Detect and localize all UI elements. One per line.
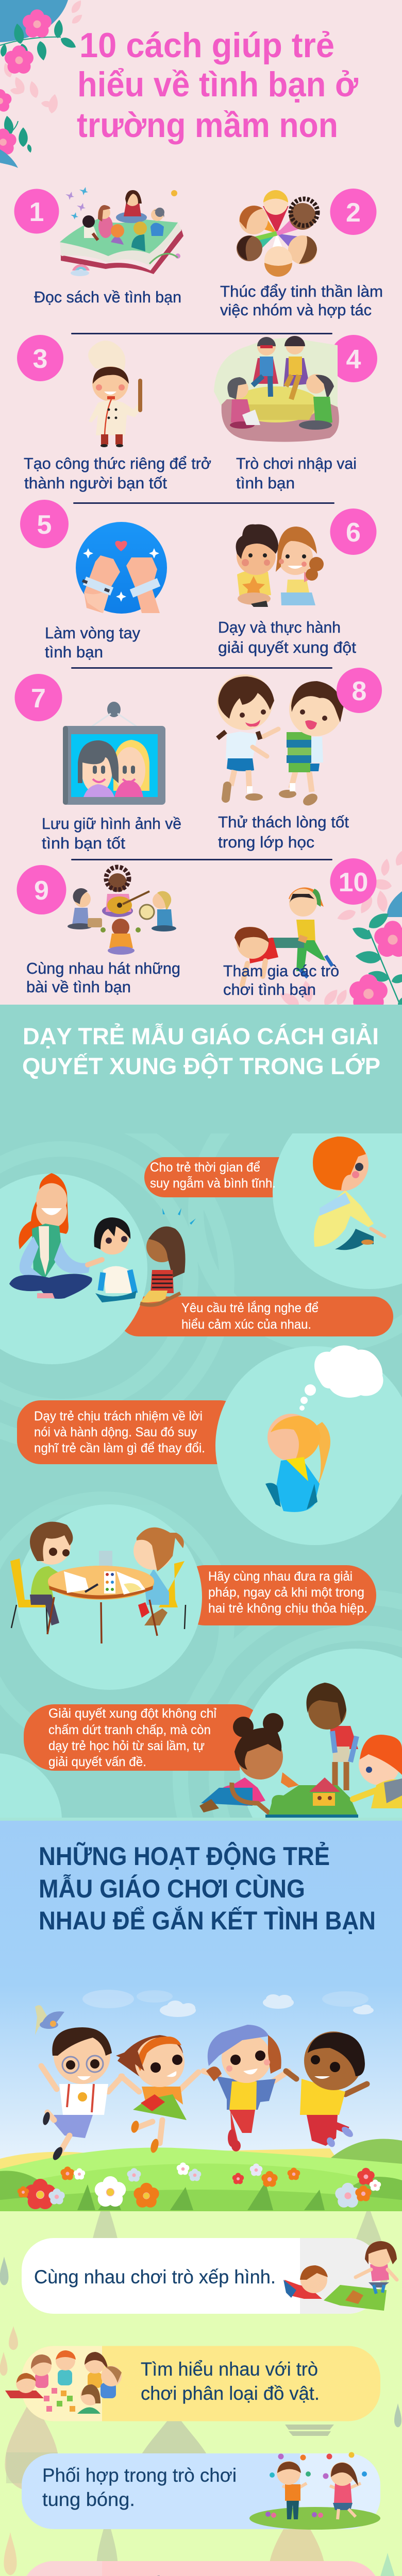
title: hiểu về tình bạn ở bbox=[77, 65, 359, 104]
text: find solutions bbox=[208, 1569, 367, 1616]
section heading: DẠY TRẺ MẪU GIÁO CÁCH GIẢI bbox=[23, 1023, 379, 1049]
item 6: teach conflict resolution: 6 bbox=[346, 518, 361, 548]
item 3: friendship recipe: 3 bbox=[33, 344, 47, 374]
item 3: friendship recipe bbox=[17, 335, 211, 492]
flowers in grass bbox=[18, 2162, 381, 2209]
item 2: team spirit bbox=[220, 189, 383, 319]
activity 1: puzzle: Cùng nhau chơi trò xếp hình. bbox=[34, 2266, 276, 2287]
item 9: sing friendship songs: Cùng nhau hát những bbox=[26, 959, 180, 977]
text: learn from mistakes: giải quyết vấn đề. bbox=[48, 1755, 146, 1769]
illustration: thinking girl with cloud bbox=[265, 1345, 383, 1512]
item 10: friendship games: chơi tình bạn bbox=[223, 980, 316, 998]
activity 4: listening bbox=[5, 2561, 380, 2576]
text: listen bbox=[181, 1300, 319, 1332]
item 4: friendship role play: tình bạn bbox=[236, 474, 295, 492]
icon: kids role-playing as superheroes bbox=[214, 336, 339, 442]
illustration: kids playing on pop-up book bbox=[199, 1683, 402, 1819]
text: learn from mistakes: chấm dứt tranh chấp, mà còn bbox=[48, 1723, 211, 1737]
activity 3: ball toss: Phối hợp trong trò chơi bbox=[42, 2465, 237, 2486]
panel: 10 ways section bbox=[0, 0, 402, 1005]
text: responsibility: Dạy trẻ chịu trách nhiệm về lời bbox=[34, 1409, 203, 1423]
activity 2: sorting game: Tìm hiểu nhau với trò bbox=[141, 2359, 318, 2380]
item 9: sing friendship songs bbox=[16, 865, 180, 996]
speech bubbles bbox=[17, 1157, 393, 1771]
thought bubble bbox=[299, 1345, 383, 1411]
item 7: keep friendship pictures: tình bạn tốt bbox=[42, 834, 125, 852]
title bbox=[77, 26, 359, 145]
item 6: teach conflict resolution: giải quyết xung đột bbox=[218, 638, 356, 656]
item 5: friendship bracelets bbox=[20, 500, 167, 661]
text: listen: Yêu cầu trẻ lắng nghe để bbox=[181, 1300, 319, 1315]
section header band bbox=[0, 1005, 402, 1133]
item 2: team spirit: 2 bbox=[346, 198, 361, 228]
icon: kids tossing balls bbox=[249, 2452, 380, 2530]
item 1: read books about friendship: Đọc sách về tình bạn bbox=[34, 288, 181, 306]
panel: activities list bbox=[0, 2211, 401, 2576]
text: listen: hiểu cảm xúc của nhau. bbox=[181, 1317, 311, 1332]
icon: kids playing music bbox=[68, 867, 176, 955]
item 5: friendship bracelets: 5 bbox=[37, 510, 52, 540]
item 2: team spirit: Thúc đẩy tinh thần làm bbox=[220, 282, 383, 300]
text: responsibility bbox=[34, 1409, 205, 1455]
text: give time bbox=[150, 1160, 276, 1191]
text: give time: suy ngẫm và bình tĩnh. bbox=[150, 1176, 276, 1191]
icon: boy and girl whispering bbox=[236, 524, 324, 607]
girl with headband bbox=[116, 2035, 198, 2154]
text: give time: Cho trẻ thời gian để bbox=[150, 1160, 260, 1175]
text: learn from mistakes: dạy trẻ học hỏi từ sai lầm, tự bbox=[48, 1739, 205, 1753]
kid with blue cap bbox=[204, 2025, 289, 2151]
item 7: keep friendship pictures: Lưu giữ hình ảnh về bbox=[42, 815, 181, 833]
item 3: friendship recipe: thành người bạn tốt bbox=[24, 474, 167, 492]
kid with glasses bbox=[41, 2027, 122, 2162]
item 7: keep friendship pictures: 7 bbox=[31, 684, 46, 714]
panel: conflict resolution section bbox=[0, 1005, 402, 1821]
section heading: QUYẾT XUNG ĐỘT TRONG LỚP bbox=[22, 1053, 380, 1079]
item 10: friendship games bbox=[223, 858, 376, 998]
item 8: kindness challenge: 8 bbox=[352, 676, 366, 706]
icon: kids on open book bbox=[60, 187, 183, 276]
decoration: bottom-right flowers bbox=[278, 846, 402, 1011]
text: responsibility: nói và hành dộng. Sau đó suy bbox=[34, 1425, 197, 1439]
illustration: four kids jumping hand in hand bbox=[41, 2025, 367, 2162]
text: learn from mistakes: Giải quyết xung đột không chỉ bbox=[48, 1706, 216, 1721]
section heading: MẪU GIÁO CHƠI CÙNG bbox=[39, 1874, 305, 1903]
icon: wrists with friendship bracelets bbox=[76, 522, 167, 614]
item 6: teach conflict resolution: Dạy và thực hành bbox=[218, 618, 341, 636]
illustration: teacher with two kids bbox=[9, 1173, 196, 1305]
illustration: kids drawing at table bbox=[10, 1522, 186, 1643]
icon: framed photo of two friends bbox=[63, 702, 165, 805]
item 3: friendship recipe: Tạo công thức riêng để trở bbox=[24, 454, 211, 472]
decoration: top-left flowers bbox=[0, 0, 84, 168]
item 6: teach conflict resolution bbox=[218, 509, 376, 656]
item 4: friendship role play bbox=[214, 335, 377, 492]
item 5: friendship bracelets: tình bạn bbox=[45, 643, 103, 661]
section heading: NHAU ĐỂ GẮN KẾT TÌNH BẠN bbox=[39, 1906, 376, 1935]
item 4: friendship role play: 4 bbox=[346, 345, 361, 375]
item 1: read books about friendship bbox=[14, 187, 183, 306]
text: find solutions: Hãy cùng nhau đưa ra giải bbox=[208, 1569, 353, 1584]
item 8: kindness challenge: Thử thách lòng tốt bbox=[218, 813, 349, 831]
item 8: kindness challenge bbox=[217, 668, 382, 851]
item 2: team spirit: việc nhóm và hợp tác bbox=[220, 301, 372, 319]
icon: kids sorting blocks bbox=[5, 2350, 122, 2414]
item 9: sing friendship songs: bài về tình bạn bbox=[26, 978, 131, 996]
section heading bbox=[39, 1841, 376, 1935]
boy with curly hair bbox=[286, 2031, 367, 2148]
icon: wheelbarrow race bbox=[234, 888, 332, 985]
text: find solutions: hai trẻ không chịu thỏa hiệp. bbox=[208, 1601, 367, 1616]
icon: chef boy bbox=[88, 341, 142, 447]
item 8: kindness challenge: trong lớp học bbox=[218, 833, 314, 851]
grass and hills bbox=[0, 2139, 402, 2211]
section heading bbox=[22, 1023, 380, 1079]
activity 2: sorting game: chơi phân loại đồ vật. bbox=[141, 2383, 320, 2404]
icon: kids with puzzle bbox=[283, 2241, 397, 2311]
panel: friendship activities hero bbox=[0, 1821, 402, 2211]
item 10: friendship games: 10 bbox=[339, 868, 368, 897]
illustration: boy sitting alone bbox=[313, 1137, 384, 1250]
text: learn from mistakes bbox=[48, 1706, 216, 1769]
text: responsibility: nghĩ trẻ cần làm gì để thay đổi. bbox=[34, 1441, 205, 1455]
text: find solutions: pháp, ngay cả khi một trong bbox=[208, 1585, 364, 1600]
title: trường mầm non bbox=[77, 106, 338, 145]
icon: bluebird bbox=[35, 2005, 64, 2035]
item 10: friendship games: Tham gia các trò bbox=[223, 962, 339, 980]
item 4: friendship role play: Trò chơi nhập vai bbox=[236, 454, 357, 472]
activity 1: puzzle bbox=[22, 2238, 397, 2314]
icon: kids in circle joining hands bbox=[237, 190, 317, 277]
item 7: keep friendship pictures bbox=[14, 674, 181, 852]
icon: boy and girl carrying books bbox=[217, 674, 344, 808]
activity 2: sorting game bbox=[5, 2346, 380, 2421]
lighter circles bbox=[0, 1095, 402, 1887]
item 1: read books about friendship: 1 bbox=[29, 197, 44, 227]
title: 10 cách giúp trẻ bbox=[79, 26, 334, 65]
clouds bbox=[82, 1990, 374, 2017]
section heading: NHỮNG HOẠT ĐỘNG TRẺ bbox=[39, 1841, 330, 1871]
activity 3: ball toss bbox=[22, 2452, 380, 2530]
activity 3: ball toss: tung bóng. bbox=[42, 2489, 135, 2510]
item 5: friendship bracelets: Làm vòng tay bbox=[45, 624, 140, 642]
item 9: sing friendship songs: 9 bbox=[34, 876, 49, 906]
